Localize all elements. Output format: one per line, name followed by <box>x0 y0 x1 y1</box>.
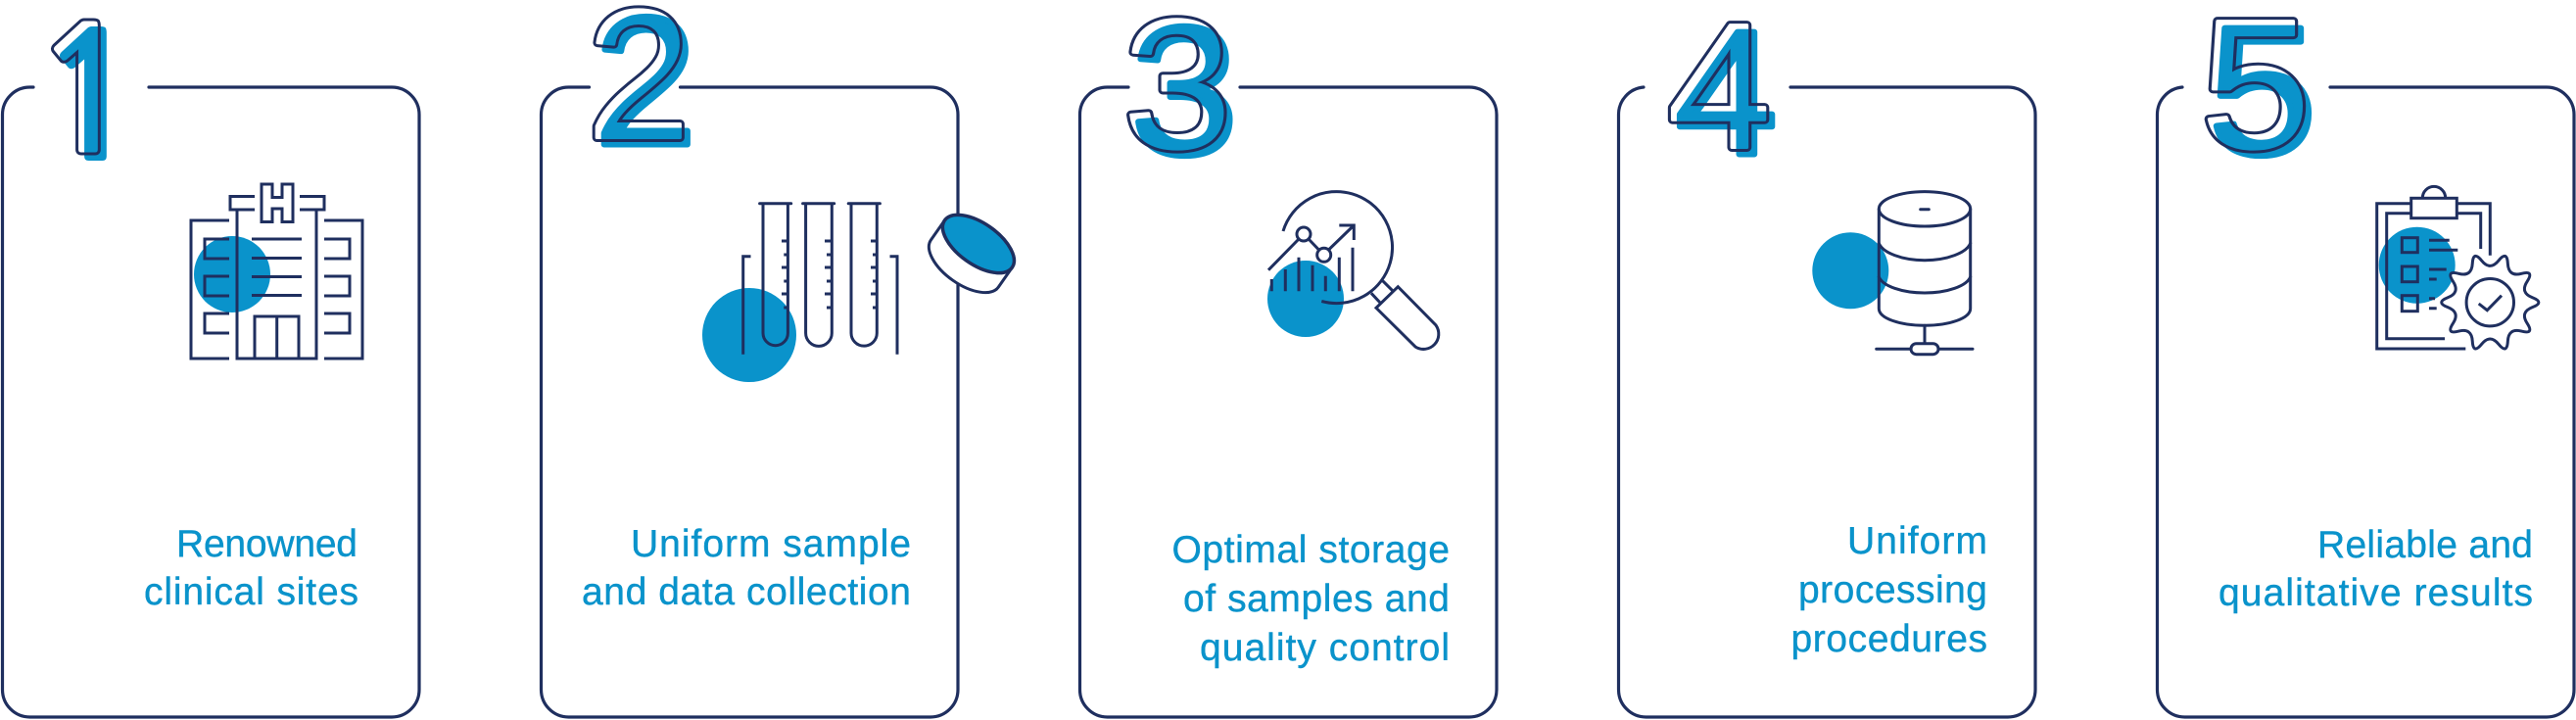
panel: step 2 <box>541 0 1024 717</box>
icon: database <box>1812 192 1973 355</box>
label: uniform processing procedures: processing <box>1798 569 1987 611</box>
label: renowned clinical sites: Renowned <box>176 523 358 565</box>
panel: step 3 <box>1079 0 1497 717</box>
panel: step 4 <box>1618 0 2035 717</box>
label: renowned clinical sites: clinical sites <box>144 571 358 613</box>
card outline 2 <box>541 87 958 717</box>
number 1: 1 <box>39 16 144 184</box>
label: uniform processing procedures: procedures <box>1790 618 1987 660</box>
number 4: 4 <box>1676 0 1778 193</box>
label: optimal storage of samples and quality control <box>1171 529 1450 669</box>
label: renowned clinical sites <box>144 523 358 613</box>
icon: test tubes <box>702 204 897 382</box>
label: uniform sample and data collection: and data collection <box>582 571 911 613</box>
label: optimal storage of samples and quality control: Optimal storage <box>1171 529 1450 571</box>
panel: step 5 <box>2157 0 2574 717</box>
label: uniform sample and data collection: Uniform sample <box>631 523 911 565</box>
card outline 3 <box>1079 87 1497 717</box>
label: optimal storage of samples and quality control: of samples and <box>1183 578 1450 620</box>
number 1 <box>51 18 107 161</box>
label: uniform processing procedures: Uniform <box>1847 520 1987 562</box>
label: uniform sample and data collection <box>582 523 911 613</box>
panel: step 1 <box>2 8 419 717</box>
icon: petri dish <box>929 204 1024 293</box>
label: optimal storage of samples and quality control: quality control <box>1200 627 1450 669</box>
number 1: 1 <box>32 8 136 178</box>
icon: clipboard with gear <box>2377 186 2539 349</box>
label: reliable and qualitative results <box>2218 524 2533 614</box>
icon: magnifier with chart <box>1267 192 1439 349</box>
label: reliable and qualitative results: Reliable and <box>2317 524 2533 566</box>
card outline 1 <box>2 87 419 717</box>
card outline 5 <box>2157 87 2574 717</box>
label: reliable and qualitative results: qualitative results <box>2218 572 2533 614</box>
label: uniform processing procedures <box>1790 520 1987 660</box>
card outline 4 <box>1618 87 2035 717</box>
icon: hospital <box>191 184 362 359</box>
